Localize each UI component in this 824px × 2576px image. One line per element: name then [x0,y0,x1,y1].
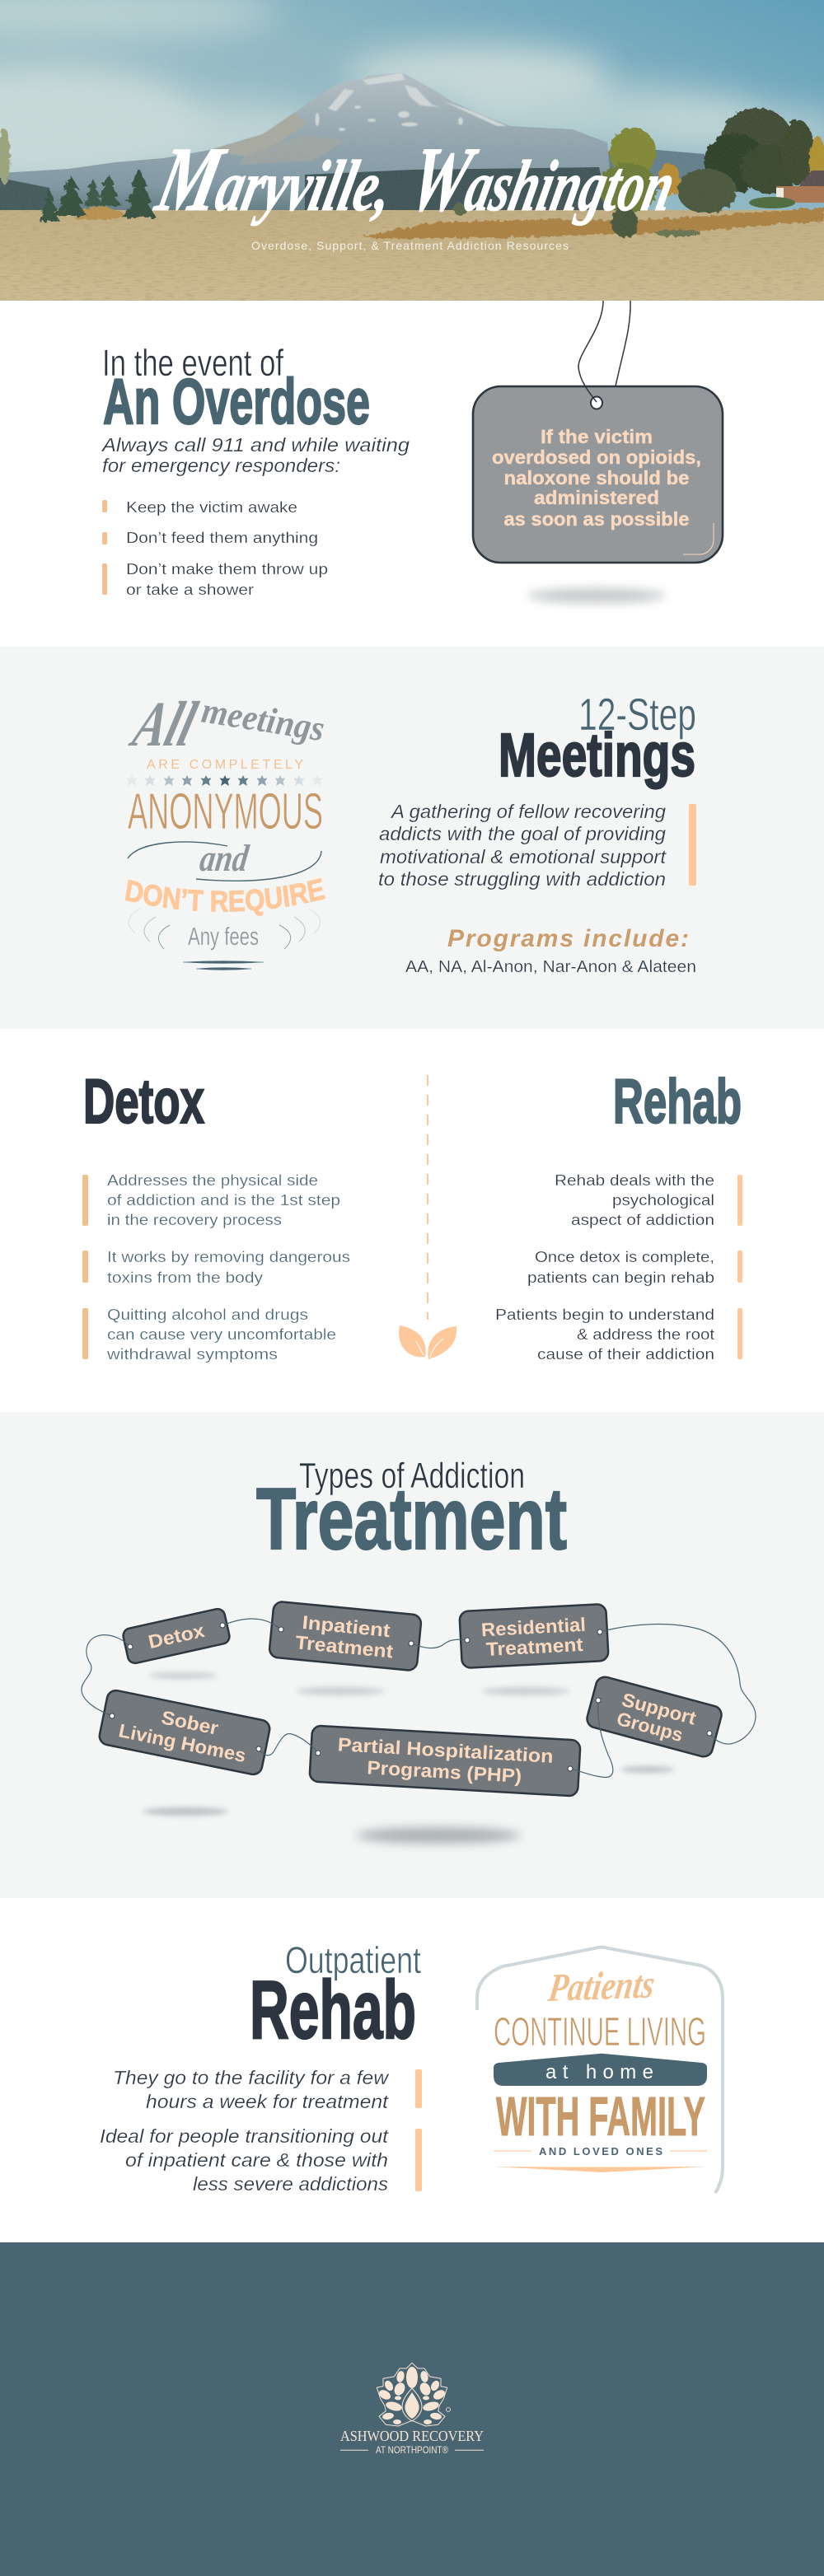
logo: Ashwood Recovery: AT NORTHPOINT® [376,2444,448,2456]
logo: Ashwood Recovery [340,2363,484,2456]
rehab bullets [495,1171,742,1363]
title: Marysville, Washington: Maryville, [147,128,405,231]
description: A gathering of fellow recovering [390,801,666,822]
tag: Residential Treatment [459,1604,609,1668]
section: in the event of an overdose [0,301,824,647]
tag: Partial Hospitalization Programs: Partial Hospitalization [337,1733,554,1767]
heading: Rehab: Rehab [613,1067,742,1137]
tag: Support Groups [585,1675,723,1759]
heading: In the event of: In the event of [102,342,283,384]
bullet list: Keep the victim awake [126,499,297,516]
detox bullets: in the recovery process [107,1211,282,1228]
title: Marysville, Washington: Washington [400,128,686,231]
tag: Inpatient Treatment [269,1601,422,1671]
detox bullets: It works by removing dangerous [107,1248,350,1265]
tag: Residential Treatment: Treatment [485,1634,584,1660]
tag: Partial Hospitalization Programs [309,1725,581,1797]
title: Marysville, Washington [152,149,672,226]
description: addicts with the goal of providing [379,823,666,844]
heading: Outpatient: Outpatient [285,1939,421,1981]
description: hours a week for treatment [146,2091,390,2112]
subtitle: Overdose, Support, & Treatment Addiction Resources [251,239,569,252]
tag: Inpatient Treatment: Inpatient [302,1611,391,1641]
tag: Residential Treatment: Residential [480,1614,587,1640]
description: motivational & emotional support [380,846,667,867]
accent bars [415,2069,422,2191]
description: to those struggling with addiction [378,868,666,890]
badge: patients continue living at home: AND LOVED ONES [539,2145,662,2158]
detox bullets: of addiction and is the 1st step [107,1191,340,1209]
rehab bullets: aspect of addiction [571,1211,714,1228]
description [100,2067,390,2195]
tag: Sober Living Homes [98,1689,271,1776]
bullet list: Don’t make them throw up [126,561,328,577]
heading: Detox: Detox [83,1067,204,1137]
programs list: AA, NA, Al-Anon, Nar-Anon & Alateen [405,958,696,976]
badge: patients continue living at home [477,1947,723,2193]
section: detox and rehab [0,1029,824,1412]
bullet list [102,499,328,598]
badge: patients continue living at home: at home [545,2061,653,2083]
tag: Partial Hospitalization Programs: Programs (PHP) [367,1756,522,1787]
tag holes [110,1623,712,1771]
section: outpatient rehab [0,1898,824,2242]
rehab bullets: psychological [612,1191,714,1209]
rehab bullets: patients can begin rehab [527,1269,714,1286]
tag: Support Groups: Support [620,1689,699,1729]
icon: leaves [399,1325,456,1359]
badge: patients continue living at home: Patients [545,1963,658,2010]
heading: Meetings: Meetings [499,721,695,789]
logo: Ashwood Recovery: ASHWOOD RECOVERY [340,2428,484,2444]
programs include: Programs include: [447,925,689,952]
hanging tag with naloxone message: If the victim [541,426,653,447]
hanging tag with naloxone message: naloxone should be [504,467,689,489]
hanging tag with naloxone message [473,301,723,603]
bullet list: or take a shower [126,582,254,598]
heading: Types of Addiction: Types of Addiction [299,1456,525,1496]
intro text [101,434,410,476]
description: Ideal for people transitioning out [100,2125,390,2147]
section: 12-step meetings [0,647,824,1029]
tag: Detox: Detox [147,1620,207,1653]
connecting strings [82,1619,756,1778]
footer [0,2242,824,2576]
description: They go to the facility for a few [113,2067,389,2088]
rehab bullets: Patients begin to understand [495,1306,714,1323]
heading: An Overdose: An Overdose [103,365,370,437]
hanging tag with naloxone message: administered [534,487,659,508]
intro text: Always call 911 and while waiting [101,434,410,456]
tag shadows [143,1672,675,1844]
tag: Detox [122,1607,231,1665]
rehab bullets: Once detox is complete, [535,1248,714,1265]
description: of inpatient care & those with [125,2149,388,2171]
hanging tag with naloxone message: as soon as possible [504,508,689,530]
bullet list: Don’t feed them anything [126,530,318,546]
accent bar [689,804,696,886]
typographic poster: all meetings are anonymous: ANONYMOUS [128,783,323,840]
typographic poster: all meetings are anonymous: All [123,689,204,760]
typographic poster: all meetings are anonymous: Any fees [188,922,259,951]
typographic poster: all meetings are anonymous: and [198,837,251,879]
tag: Sober Living Homes: Living Homes [117,1719,248,1766]
detox bullets: Quitting alcohol and drugs [107,1306,308,1323]
rehab bullets: & address the root [577,1325,714,1343]
heading: Treatment: Treatment [256,1470,567,1568]
typographic poster: all meetings are anonymous: ARE COMPLETELY [147,758,303,772]
hanging tag with naloxone message: overdosed on opioids, [492,446,701,468]
section: types of addiction treatment [0,1412,824,1898]
detox bullets: Addresses the physical side [107,1171,318,1189]
detox bullets: toxins from the body [107,1269,264,1286]
tag: Support Groups: Groups [615,1708,686,1746]
intro text: for emergency responders: [102,455,340,476]
tag: Inpatient Treatment: Treatment [294,1631,395,1662]
dashed divider [427,1075,428,1320]
heading: 12-Step: 12-Step [578,689,696,740]
rehab bullets: Rehab deals with the [555,1171,714,1189]
detox bullets: can cause very uncomfortable [107,1325,336,1343]
typographic poster: all meetings are anonymous: DON’T REQUIRE [125,878,325,916]
hero: mountain landscape photo with title [0,0,824,301]
tag: Sober Living Homes: Sober [160,1706,220,1739]
detox bullets: withdrawal symptoms [106,1345,278,1363]
description [378,801,667,890]
rehab bullets: cause of their addiction [537,1345,714,1363]
heading: Rehab: Rehab [250,1964,416,2056]
typographic poster: all meetings are anonymous [123,689,327,970]
description: less severe addictions [193,2173,389,2195]
detox bullets [82,1171,350,1363]
typographic poster: all meetings are anonymous: meetings [199,690,327,749]
